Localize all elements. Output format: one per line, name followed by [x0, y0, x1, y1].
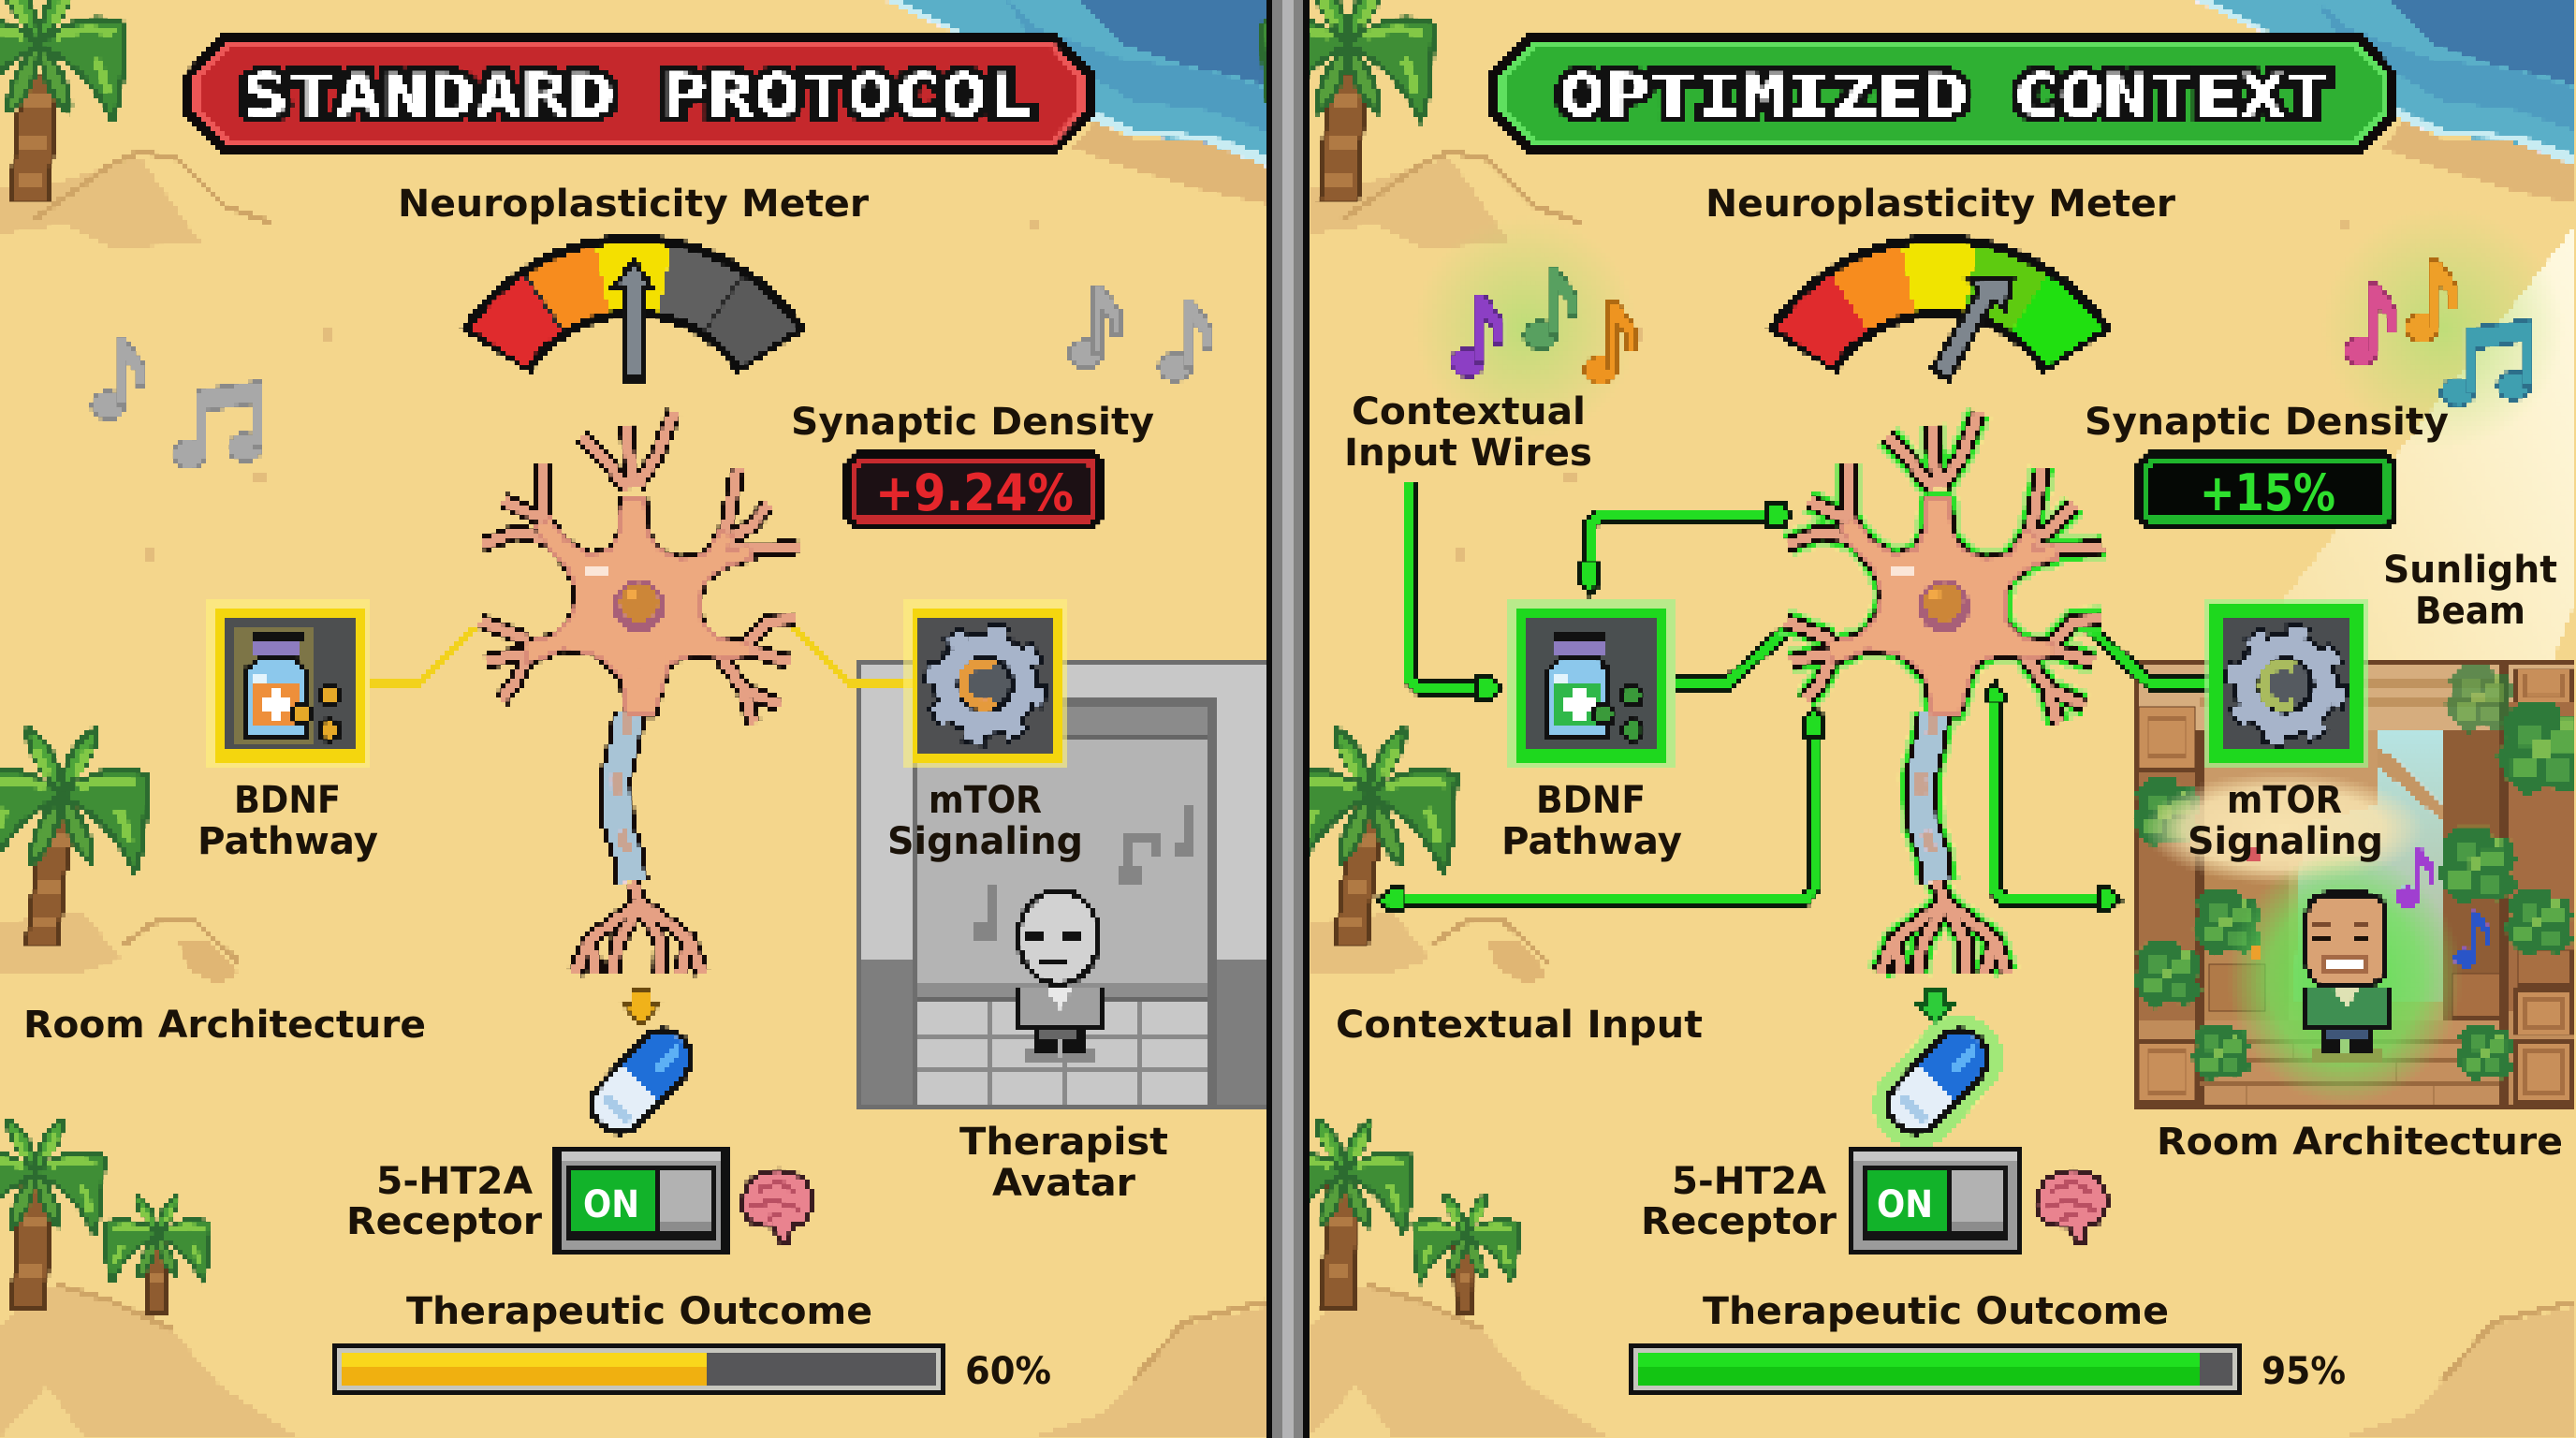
icon: palm tree top left [0, 0, 125, 201]
label: sunlight beam: Sunlight [2383, 549, 2557, 592]
title banner: red [184, 31, 1094, 155]
label: synaptic density: Synaptic Density [791, 401, 1154, 444]
label: mTOR signaling: Signaling [887, 820, 1083, 863]
label: therapeutic outcome: Therapeutic Outcome [1703, 1290, 2169, 1333]
sand dunes [0, 152, 1266, 1438]
label: synaptic density: Synaptic Density [2085, 401, 2449, 444]
progress bar: 60% [332, 1342, 944, 1395]
label: therapist avatar [959, 1121, 1168, 1205]
label: sunlight beam: Beam [2415, 590, 2525, 633]
value: +15%: +15% [2200, 463, 2335, 522]
capsule glow [1916, 1058, 1960, 1105]
room: sterile gray therapy room [855, 661, 1266, 1110]
label: contextual input wires [1344, 390, 1592, 475]
label: room architecture: Room Architecture [2157, 1121, 2563, 1164]
label: mTOR signaling: Signaling [2188, 820, 2383, 863]
label: mTOR signaling [2188, 779, 2383, 863]
arrow: green down [1915, 989, 1954, 1024]
label: BDNF pathway: Pathway [1501, 820, 1682, 863]
label: mTOR signaling: mTOR [2227, 779, 2342, 822]
label: BDNF pathway: BDNF [1536, 779, 1646, 822]
label: contextual input wires: Contextual [1352, 390, 1586, 433]
icon: palm tree top left [1262, 0, 1434, 201]
labels: standard panel [23, 183, 1168, 1393]
icon box: BDNF bottle [207, 600, 370, 768]
label: contextual input wires: Input Wires [1344, 432, 1592, 475]
gauge needle [1932, 278, 2012, 380]
value box: synaptic density [2136, 450, 2397, 531]
sand background [0, 0, 1266, 1438]
room: warm biophilic room [2131, 660, 2576, 1109]
label: therapeutic outcome: Therapeutic Outcome [406, 1290, 872, 1333]
progress bar: 95% [1631, 1342, 2241, 1395]
icon: faded notes in room [972, 805, 1194, 942]
icon: brain [741, 1170, 812, 1241]
value box: synaptic density [844, 450, 1105, 531]
gauge needle [612, 261, 653, 379]
icon: palm tree lower left [1275, 1119, 1413, 1309]
title banner: green [1489, 31, 2398, 155]
sand background [1310, 0, 2576, 1438]
icon box: BDNF bottle [1508, 598, 1676, 770]
icon: gray music notes [92, 286, 1211, 468]
icon: palm tree middle left [0, 728, 148, 946]
icon: notes inside room [2247, 846, 2491, 968]
value: +9.24%: +9.24% [875, 463, 1074, 522]
value: 95%: 95% [2261, 1350, 2346, 1393]
center divider [1266, 0, 1310, 1438]
icon: palm tree middle left [1284, 728, 1456, 946]
neuron glow [1785, 412, 2103, 974]
icon: drug capsule [1905, 1034, 1984, 1118]
scene art: optimized panel [1262, 0, 2576, 1438]
label: therapist avatar: Avatar [992, 1162, 1135, 1205]
switch text: ON: ON [1877, 1183, 1933, 1226]
label: mTOR signaling: mTOR [929, 779, 1042, 822]
label: 5-HT2A receptor [346, 1160, 542, 1243]
panel: optimized context [1262, 0, 2576, 1438]
label: room architecture: Room Architecture [23, 1004, 426, 1047]
label: neuroplasticity meter: Neuroplasticity Meter [398, 183, 869, 226]
5-HT2A switch [1848, 1149, 2022, 1255]
icon: small palm tree [104, 1194, 211, 1313]
panel: standard protocol [0, 0, 1266, 1438]
icon box: mTOR gear [2203, 597, 2370, 770]
scene art: standard panel [0, 0, 1266, 1438]
label: contextual input: Contextual Input [1336, 1004, 1703, 1047]
ocean and shoreline [883, 0, 1266, 204]
label: BDNF pathway [198, 779, 378, 863]
label: BDNF pathway: Pathway [198, 820, 378, 863]
label: 5-HT2A receptor [1641, 1160, 1837, 1243]
gauge: neuroplasticity meter [1801, 276, 2078, 352]
neuron [480, 412, 798, 974]
icon: brain [2036, 1170, 2107, 1241]
title: optimized context: OPTIMIZED CONTEXT [1559, 62, 2331, 130]
label: BDNF pathway [1501, 779, 1682, 863]
sand dunes [1310, 152, 2576, 1438]
label: 5-HT2A receptor: 5-HT2A [376, 1160, 533, 1203]
gauge: neuroplasticity meter [495, 275, 772, 352]
label: 5-HT2A receptor: Receptor [346, 1200, 542, 1243]
labels: optimized panel [1336, 183, 2563, 1393]
icon: drug capsule [608, 1034, 688, 1118]
label: sunlight beam [2383, 549, 2557, 633]
label: BDNF pathway: BDNF [234, 779, 341, 822]
switch text: ON: ON [583, 1183, 639, 1226]
5-HT2A switch [554, 1149, 728, 1255]
wires: contextual input [1378, 484, 2211, 912]
neuron [1785, 412, 2103, 974]
icon: colorful music notes right [2321, 206, 2565, 449]
therapist avatar: smiling [2304, 891, 2390, 1062]
icon box: mTOR gear [904, 601, 1067, 768]
wires: weak yellow links [370, 628, 913, 683]
icon: colorful music notes left [1413, 215, 1638, 440]
label: 5-HT2A receptor: Receptor [1641, 1200, 1837, 1243]
arrow: yellow down [622, 989, 660, 1024]
value: 60%: 60% [965, 1350, 1051, 1393]
label: therapist avatar: Therapist [959, 1121, 1168, 1164]
therapist avatar: gray [1016, 888, 1103, 1064]
title: standard protocol: STANDARD PROTOCOL [242, 62, 1033, 130]
ocean and shoreline [2192, 0, 2576, 204]
label: mTOR signaling [887, 779, 1083, 863]
label: 5-HT2A receptor: 5-HT2A [1672, 1160, 1826, 1203]
icon: palm tree lower left [0, 1119, 105, 1309]
label: neuroplasticity meter: Neuroplasticity Meter [1705, 183, 2175, 226]
sunlight beam [2247, 225, 2576, 974]
icon: small palm tree [1412, 1194, 1519, 1313]
